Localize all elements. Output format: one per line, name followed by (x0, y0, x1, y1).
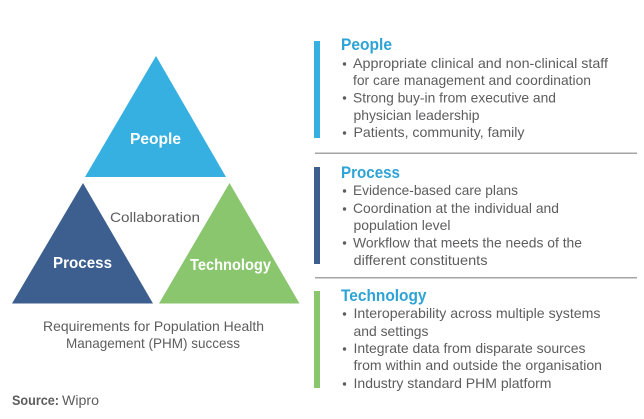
accent bar: Process (314, 167, 320, 264)
label: Collaboration: Collaboration (110, 210, 200, 225)
bullet: coordination: population level (354, 218, 450, 233)
heading: Process: Process (341, 164, 400, 182)
bullet: leadership buy-in: physician leadership (354, 108, 480, 123)
heading: People: People (341, 36, 392, 54)
panel: People (314, 36, 608, 140)
triangle: Process (12, 183, 153, 304)
bullet: clinical staff: for care management and coordination (353, 73, 591, 88)
source note (12, 393, 99, 408)
bullet: patients: Patients, community, family (354, 125, 525, 140)
diagram caption: Management (PHM) success (66, 336, 240, 351)
bullet: workflow: different constituents (354, 253, 488, 268)
source note: Source: (12, 393, 59, 408)
bullet: PHM platform: Industry standard PHM platform (354, 376, 552, 391)
bullet: leadership buy-in (343, 90, 556, 123)
accent bar: People (314, 41, 320, 138)
bullet: care plans: Evidence-based care plans (353, 183, 518, 198)
heading: Technology: Technology (341, 287, 427, 305)
bullet: leadership buy-in: Strong buy-in from executive and (353, 90, 556, 106)
diagram caption (43, 319, 264, 351)
bullet: data integration (343, 341, 602, 373)
triangle: Technology (159, 183, 300, 304)
triangle diagram (12, 56, 300, 304)
bullet: workflow (343, 236, 582, 268)
panel: Process (314, 164, 582, 268)
bullet: coordination (343, 201, 559, 233)
panel: Technology (314, 287, 602, 391)
bullet: interoperability: Interoperability across multiple systems (354, 306, 601, 321)
diagram caption: Requirements for Population Health (43, 319, 264, 334)
bullet: clinical staff: Appropriate clinical and non-clinical staff (353, 56, 608, 71)
bullet: clinical staff (343, 56, 608, 88)
triangle: Technology: Technology (190, 257, 271, 274)
bullet: interoperability (343, 306, 601, 339)
source note: Wipro (62, 393, 99, 408)
triangle: Process: Process (53, 255, 112, 272)
triangle: People: People (130, 131, 181, 148)
bullet: interoperability: and settings (354, 324, 429, 339)
accent bar: Technology (314, 291, 320, 388)
bullet: workflow: Workflow that meets the needs of the (353, 236, 582, 250)
bullet: coordination: Coordination at the individual and (353, 201, 559, 216)
bullet: data integration: from within and outside the organisation (354, 358, 602, 373)
bullet: data integration: Integrate data from disparate sources (354, 341, 586, 356)
triangle: People (85, 56, 226, 177)
